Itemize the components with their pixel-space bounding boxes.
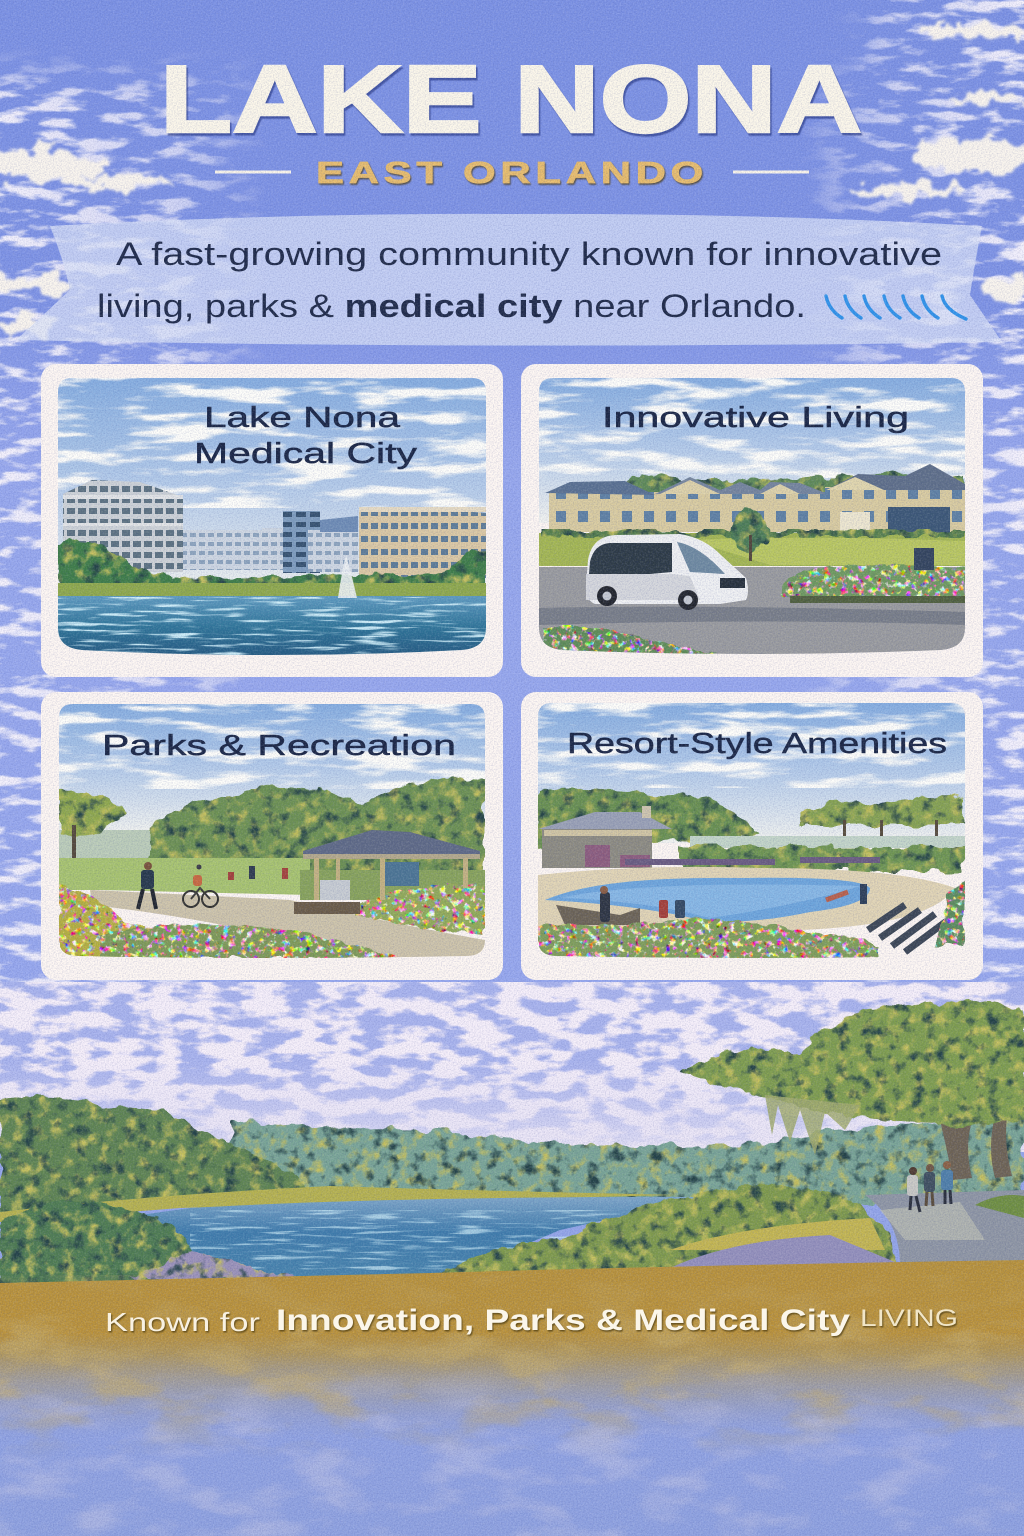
pavilion	[538, 806, 672, 868]
title: LAKE NONA	[160, 46, 862, 153]
card title: Parks & Recreation	[102, 730, 456, 762]
card title	[194, 402, 418, 470]
scene: medical city and lake	[58, 378, 486, 658]
tree line	[150, 778, 485, 880]
lake	[90, 1197, 710, 1285]
shuttle bus	[586, 534, 748, 610]
distant buildings	[183, 530, 263, 570]
walkers	[907, 1161, 953, 1212]
footer emphasis: Innovation, Parks & Medical City	[276, 1304, 850, 1337]
footer lead-in: Known for	[105, 1307, 260, 1337]
footer trailing word: LIVING	[860, 1305, 958, 1332]
flowers right	[355, 884, 485, 935]
purple wildflowers	[130, 1250, 300, 1280]
background trees	[626, 470, 964, 492]
walking path	[865, 1190, 1024, 1265]
hedge	[680, 846, 965, 872]
oak canopy	[680, 1001, 1024, 1125]
panel: Innovative Living	[521, 364, 983, 677]
card title: Medical City	[194, 438, 418, 470]
left tree	[59, 791, 128, 867]
townhomes	[545, 464, 965, 535]
ribbon line 1: A fast-growing community known for innovative	[116, 236, 942, 272]
lake water	[58, 596, 486, 658]
foreground flowers	[543, 626, 720, 654]
foreground shrubs left	[0, 1200, 270, 1290]
ribbon line 2: living, parks & medical city near Orlando.	[97, 288, 806, 324]
distant field	[690, 836, 965, 848]
trees and hedge	[58, 540, 486, 590]
scene: resort pool	[538, 703, 965, 962]
left forest	[0, 1096, 320, 1215]
lawn	[80, 858, 310, 895]
loungers and guests	[556, 860, 948, 952]
background trees	[538, 788, 760, 850]
sign	[914, 548, 934, 570]
far shore grass	[0, 1186, 680, 1222]
lawn	[58, 583, 486, 597]
grass swale	[670, 1218, 885, 1250]
card title: Resort-Style Amenities	[567, 728, 947, 760]
lakeside landscape	[0, 1001, 1024, 1290]
spanish moss	[765, 1095, 860, 1155]
distant forest	[230, 1120, 1024, 1205]
oak trunks	[935, 1095, 1012, 1180]
pavilion	[294, 830, 480, 914]
swimming pool	[545, 878, 870, 921]
bright cloud banks	[0, 24, 1024, 334]
right tan building	[359, 507, 486, 578]
icon: water waves	[826, 296, 966, 319]
subtitle with rules: EAST ORLANDO	[316, 155, 708, 190]
central tower	[262, 511, 358, 573]
path	[90, 890, 485, 958]
lavender patch	[670, 1235, 895, 1272]
flowers left	[59, 885, 240, 958]
panel: Parks & Recreation	[41, 692, 503, 980]
flower bed	[778, 564, 965, 600]
small tree	[730, 510, 770, 561]
card title: Innovative Living	[602, 402, 909, 434]
fountain	[338, 555, 357, 598]
flowers	[538, 918, 880, 962]
subtitle with rules	[215, 155, 809, 190]
card title: Lake Nona	[204, 402, 401, 434]
footer tagline	[105, 1304, 958, 1337]
cloud field on the sides	[0, 0, 1024, 1000]
panel: Lake Nona Medical City	[41, 364, 503, 677]
shrub hill right	[430, 1185, 900, 1280]
scene: homes and shuttle	[539, 378, 965, 660]
panel: Resort-Style Amenities	[521, 692, 983, 980]
intro ribbon banner	[16, 214, 1002, 346]
lawn	[539, 533, 965, 566]
cumulus cloud field	[0, 982, 1024, 1152]
left hospital building	[63, 480, 183, 572]
scene: park and pavilion	[59, 704, 485, 958]
gold ground band fading into sky	[0, 1260, 1024, 1536]
people and bike	[138, 862, 288, 909]
road	[539, 567, 965, 660]
distant field	[59, 830, 152, 858]
pool deck	[538, 867, 955, 935]
